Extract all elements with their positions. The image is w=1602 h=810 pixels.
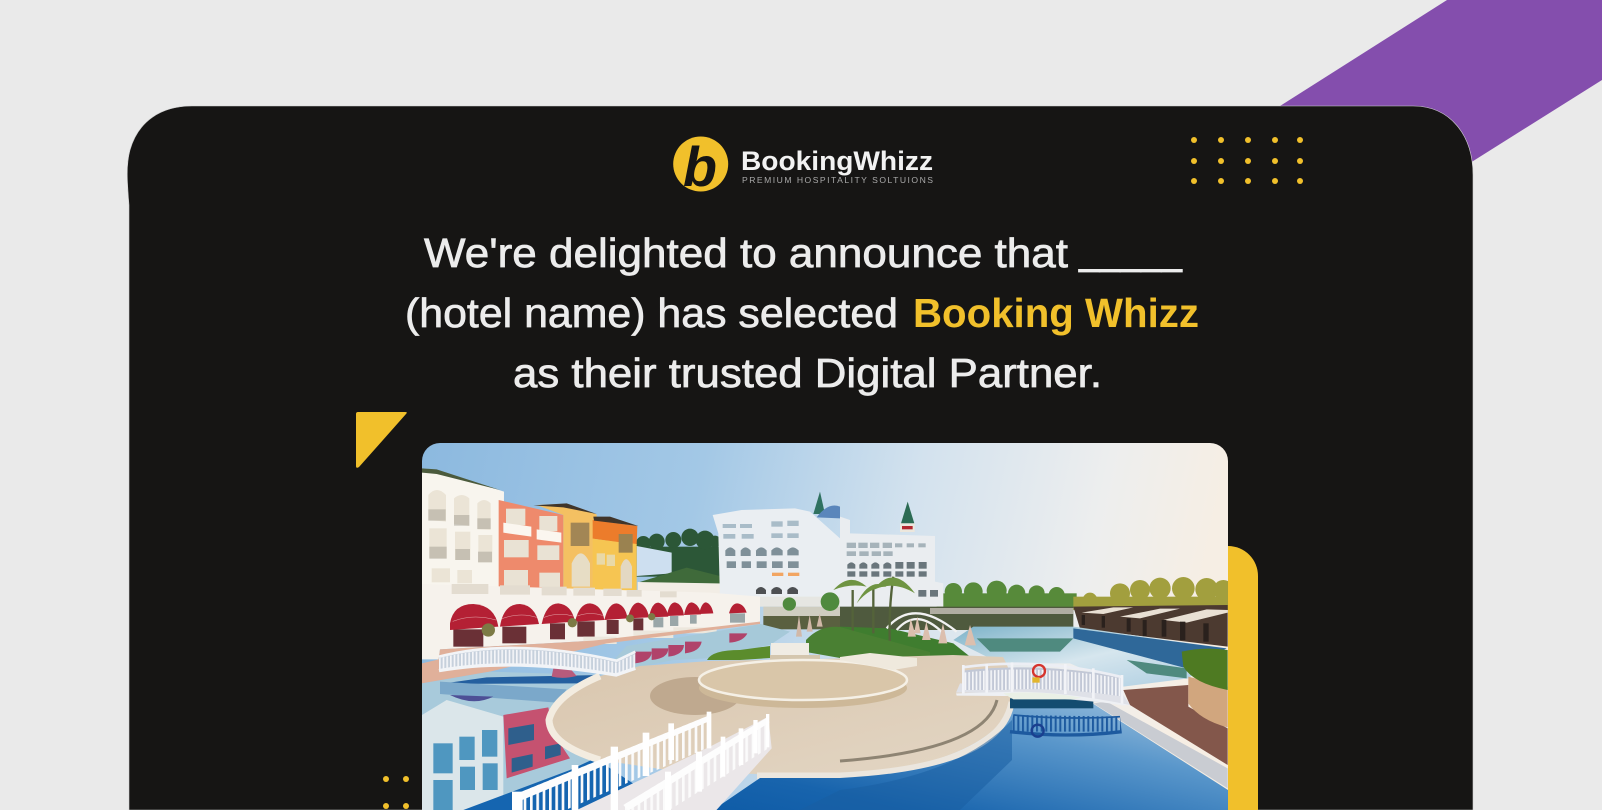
logo (673, 135, 933, 198)
logo letter b: b (683, 135, 717, 198)
palms (853, 577, 893, 648)
yellow panel behind photo (1228, 546, 1258, 810)
tree line (937, 581, 1077, 610)
hedge band behind gazebo (840, 607, 1073, 630)
reflection of coral building (503, 707, 570, 778)
pool edge (1093, 702, 1228, 788)
upper pool water (615, 624, 790, 667)
platform shadow (650, 677, 740, 715)
highlighted brand name: Booking Whizz (913, 290, 1199, 336)
life ring (1033, 665, 1045, 677)
far scene right (833, 502, 1233, 687)
bridge reflection (1010, 715, 1122, 737)
pool shadow (800, 720, 1012, 810)
right bridge (956, 683, 1130, 705)
terrace wall (422, 584, 760, 659)
coral building (499, 500, 563, 588)
foreground pool (713, 703, 1228, 810)
right hotel main (713, 508, 840, 603)
tower (901, 502, 914, 523)
brown deck (1123, 685, 1228, 765)
foreground walkway (573, 717, 772, 810)
shop windows (453, 618, 643, 647)
dot grid: bottom left (383, 776, 409, 809)
yellow triangle accent (356, 412, 407, 468)
reflection of bridge (440, 682, 567, 703)
near scene left (439, 648, 772, 810)
icon: logo circle (673, 136, 728, 192)
walkway (422, 622, 760, 683)
headline line 3: as their trusted Digital Partner. (513, 350, 1102, 396)
far scene left (422, 468, 840, 810)
circular platform (699, 660, 907, 708)
headline blank: _____ (1078, 227, 1183, 273)
round planter (1188, 677, 1228, 727)
white arcaded building (422, 468, 504, 587)
blue water left (464, 760, 633, 810)
headline line 1: We're delighted to announce that (424, 230, 1069, 276)
garden hedges (840, 626, 969, 656)
back pool (953, 627, 1227, 687)
blue building (637, 546, 672, 576)
white block on right of platform (840, 653, 917, 670)
left bridge (439, 648, 635, 675)
orange and gold wing (593, 520, 637, 545)
left pool water (422, 672, 590, 795)
green roof pavilion (640, 568, 720, 584)
hotel photo (422, 443, 1233, 810)
reflection of white building (422, 700, 503, 810)
red awnings (450, 602, 747, 630)
planter trees (482, 613, 655, 637)
headline (405, 227, 1199, 396)
dot grid: top right (1191, 137, 1303, 184)
logo tagline: PREMIUM HOSPITALITY SOLTUIONS (742, 175, 933, 185)
garden by platform (707, 627, 930, 662)
near scene right (956, 649, 1228, 788)
black card (127, 106, 1473, 810)
gazebo (887, 613, 957, 633)
headline line 2: (hotel name) has selected (405, 290, 898, 336)
purple diagonal ribbon (1280, 0, 1602, 163)
pergolas (1073, 605, 1228, 647)
main round deck (548, 655, 1013, 775)
hotel wing (840, 517, 943, 607)
foreground white fence (512, 712, 769, 810)
logo wordmark: BookingWhizz (741, 146, 933, 176)
terrace beyond pavilion (760, 597, 840, 607)
yellow building (537, 504, 597, 590)
deck rim (549, 676, 1012, 776)
trees behind (635, 529, 721, 577)
umbrellas (908, 617, 976, 645)
